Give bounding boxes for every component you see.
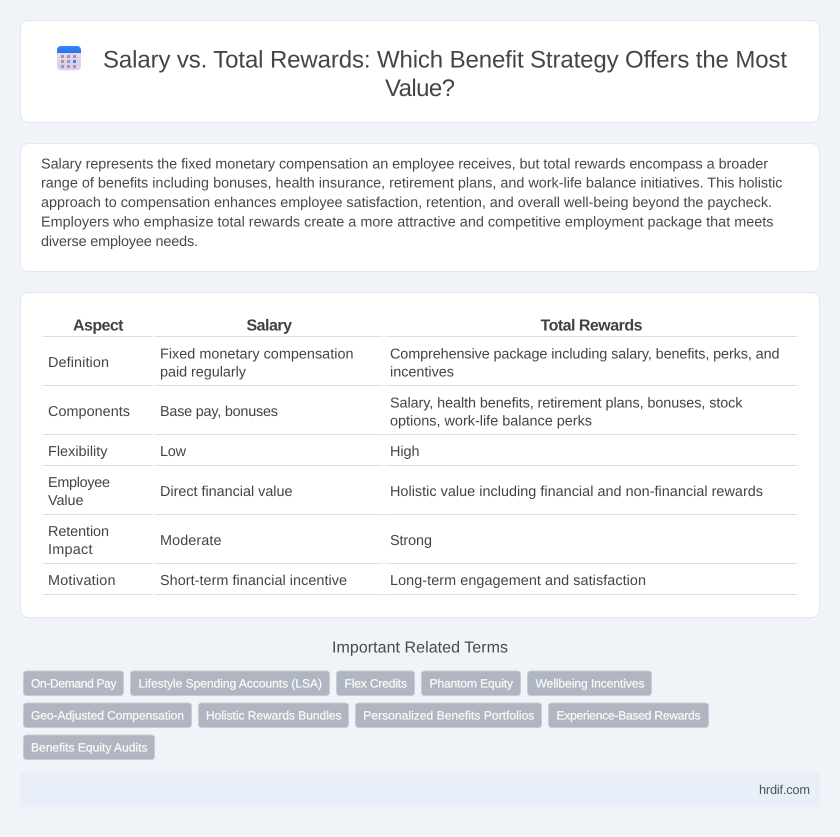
tag: holistic rewards bundles (198, 703, 348, 728)
row: definition: incentives (390, 364, 454, 380)
tag: lifestyle spending accounts (130, 671, 330, 696)
heading: related terms: Important Related Terms (332, 640, 508, 657)
row: retention impact: Retention (48, 524, 109, 540)
table header (73, 318, 643, 335)
intro paragraph: diverse employee needs. (41, 234, 198, 250)
row: components (48, 395, 743, 429)
tag: personalized benefits portfolios (356, 703, 542, 728)
tag: lifestyle spending accounts: Lifestyle Spending Accounts (LSA) (138, 676, 322, 690)
panel: title header (20, 20, 820, 122)
row: motivation: Short-term financial incentive (160, 573, 347, 589)
row: motivation: Long-term engagement and satisfaction (390, 573, 646, 589)
tag: benefits equity audits (24, 735, 154, 760)
row: flexibility (48, 444, 420, 460)
tag: wellbeing incentives (528, 671, 652, 696)
row: retention impact: Strong (390, 533, 432, 549)
table header: Aspect (73, 318, 124, 335)
row: employee value (48, 475, 763, 509)
table header: Total Rewards (540, 318, 643, 335)
panel: introduction (20, 144, 820, 272)
row: motivation (48, 573, 646, 589)
row: definition: Definition (48, 355, 109, 371)
table header: Salary (246, 318, 292, 335)
title (103, 46, 787, 102)
tag: personalized benefits portfolios: Personalized Benefits Portfolios (363, 708, 534, 722)
tag: holistic rewards bundles: Holistic Rewards Bundles (206, 708, 342, 722)
row: flexibility: Low (160, 444, 187, 460)
intro paragraph: Employers who emphasize total rewards create a more attractive and competitive employment package that meets (41, 214, 774, 230)
row: retention impact: Impact (48, 542, 92, 558)
tag: on-demand pay: On-Demand Pay (31, 676, 116, 690)
tag: experience-based rewards (548, 703, 708, 728)
row: employee value: Holistic value including financial and non-financial rewards (390, 484, 763, 500)
title: Value? (385, 75, 455, 102)
intro paragraph (41, 156, 782, 250)
row: components: Salary, health benefits, retirement plans, bonuses, stock (390, 395, 743, 411)
panel: comparison table (20, 292, 820, 618)
row: retention impact: Moderate (160, 533, 222, 549)
intro paragraph: Salary represents the fixed monetary compensation an employee receives, but total rewards encompass a broader (41, 156, 768, 172)
row: retention impact (48, 524, 432, 558)
footer bar (20, 773, 820, 807)
related term tags (24, 671, 708, 760)
title: Salary vs. Total Rewards: Which Benefit Strategy Offers the Most (103, 46, 787, 74)
row: definition: Fixed monetary compensation (160, 346, 354, 362)
tag: on-demand pay (24, 671, 124, 696)
tag: geo-adjusted compensation: Geo-Adjusted Compensation (31, 708, 184, 722)
tag: benefits equity audits: Benefits Equity Audits (31, 740, 148, 754)
table rules (43, 336, 797, 595)
tag: experience-based rewards: Experience-Based Rewards (556, 708, 700, 722)
row: flexibility: High (390, 444, 420, 460)
intro paragraph: range of benefits including bonuses, health insurance, retirement plans, and work-life balance initiatives. This holistic (41, 176, 782, 192)
tag: phantom equity (422, 671, 520, 696)
row: employee value: Employee (48, 475, 110, 491)
icon: calendar (57, 46, 81, 70)
tag: flex credits: Flex Credits (344, 676, 407, 690)
row: components: Base pay, bonuses (160, 404, 278, 420)
row: components: Components (48, 404, 130, 420)
tag: flex credits (336, 671, 414, 696)
footer source: hrdif.com (759, 782, 810, 797)
row: employee value: Value (48, 493, 84, 509)
intro paragraph: approach to compensation enhances employee satisfaction, retention, and overall well-being beyond the paycheck. (41, 195, 772, 211)
row: definition: paid regularly (160, 364, 247, 380)
tag: wellbeing incentives: Wellbeing Incentives (536, 676, 644, 690)
row: flexibility: Flexibility (48, 444, 108, 460)
row: employee value: Direct financial value (160, 484, 292, 500)
row: definition (48, 346, 780, 380)
tag: phantom equity: Phantom Equity (430, 676, 513, 690)
tag: geo-adjusted compensation (24, 703, 192, 728)
row: motivation: Motivation (48, 573, 116, 589)
row: components: options, work-life balance perks (390, 413, 592, 429)
row: definition: Comprehensive package including salary, benefits, perks, and (390, 346, 780, 362)
